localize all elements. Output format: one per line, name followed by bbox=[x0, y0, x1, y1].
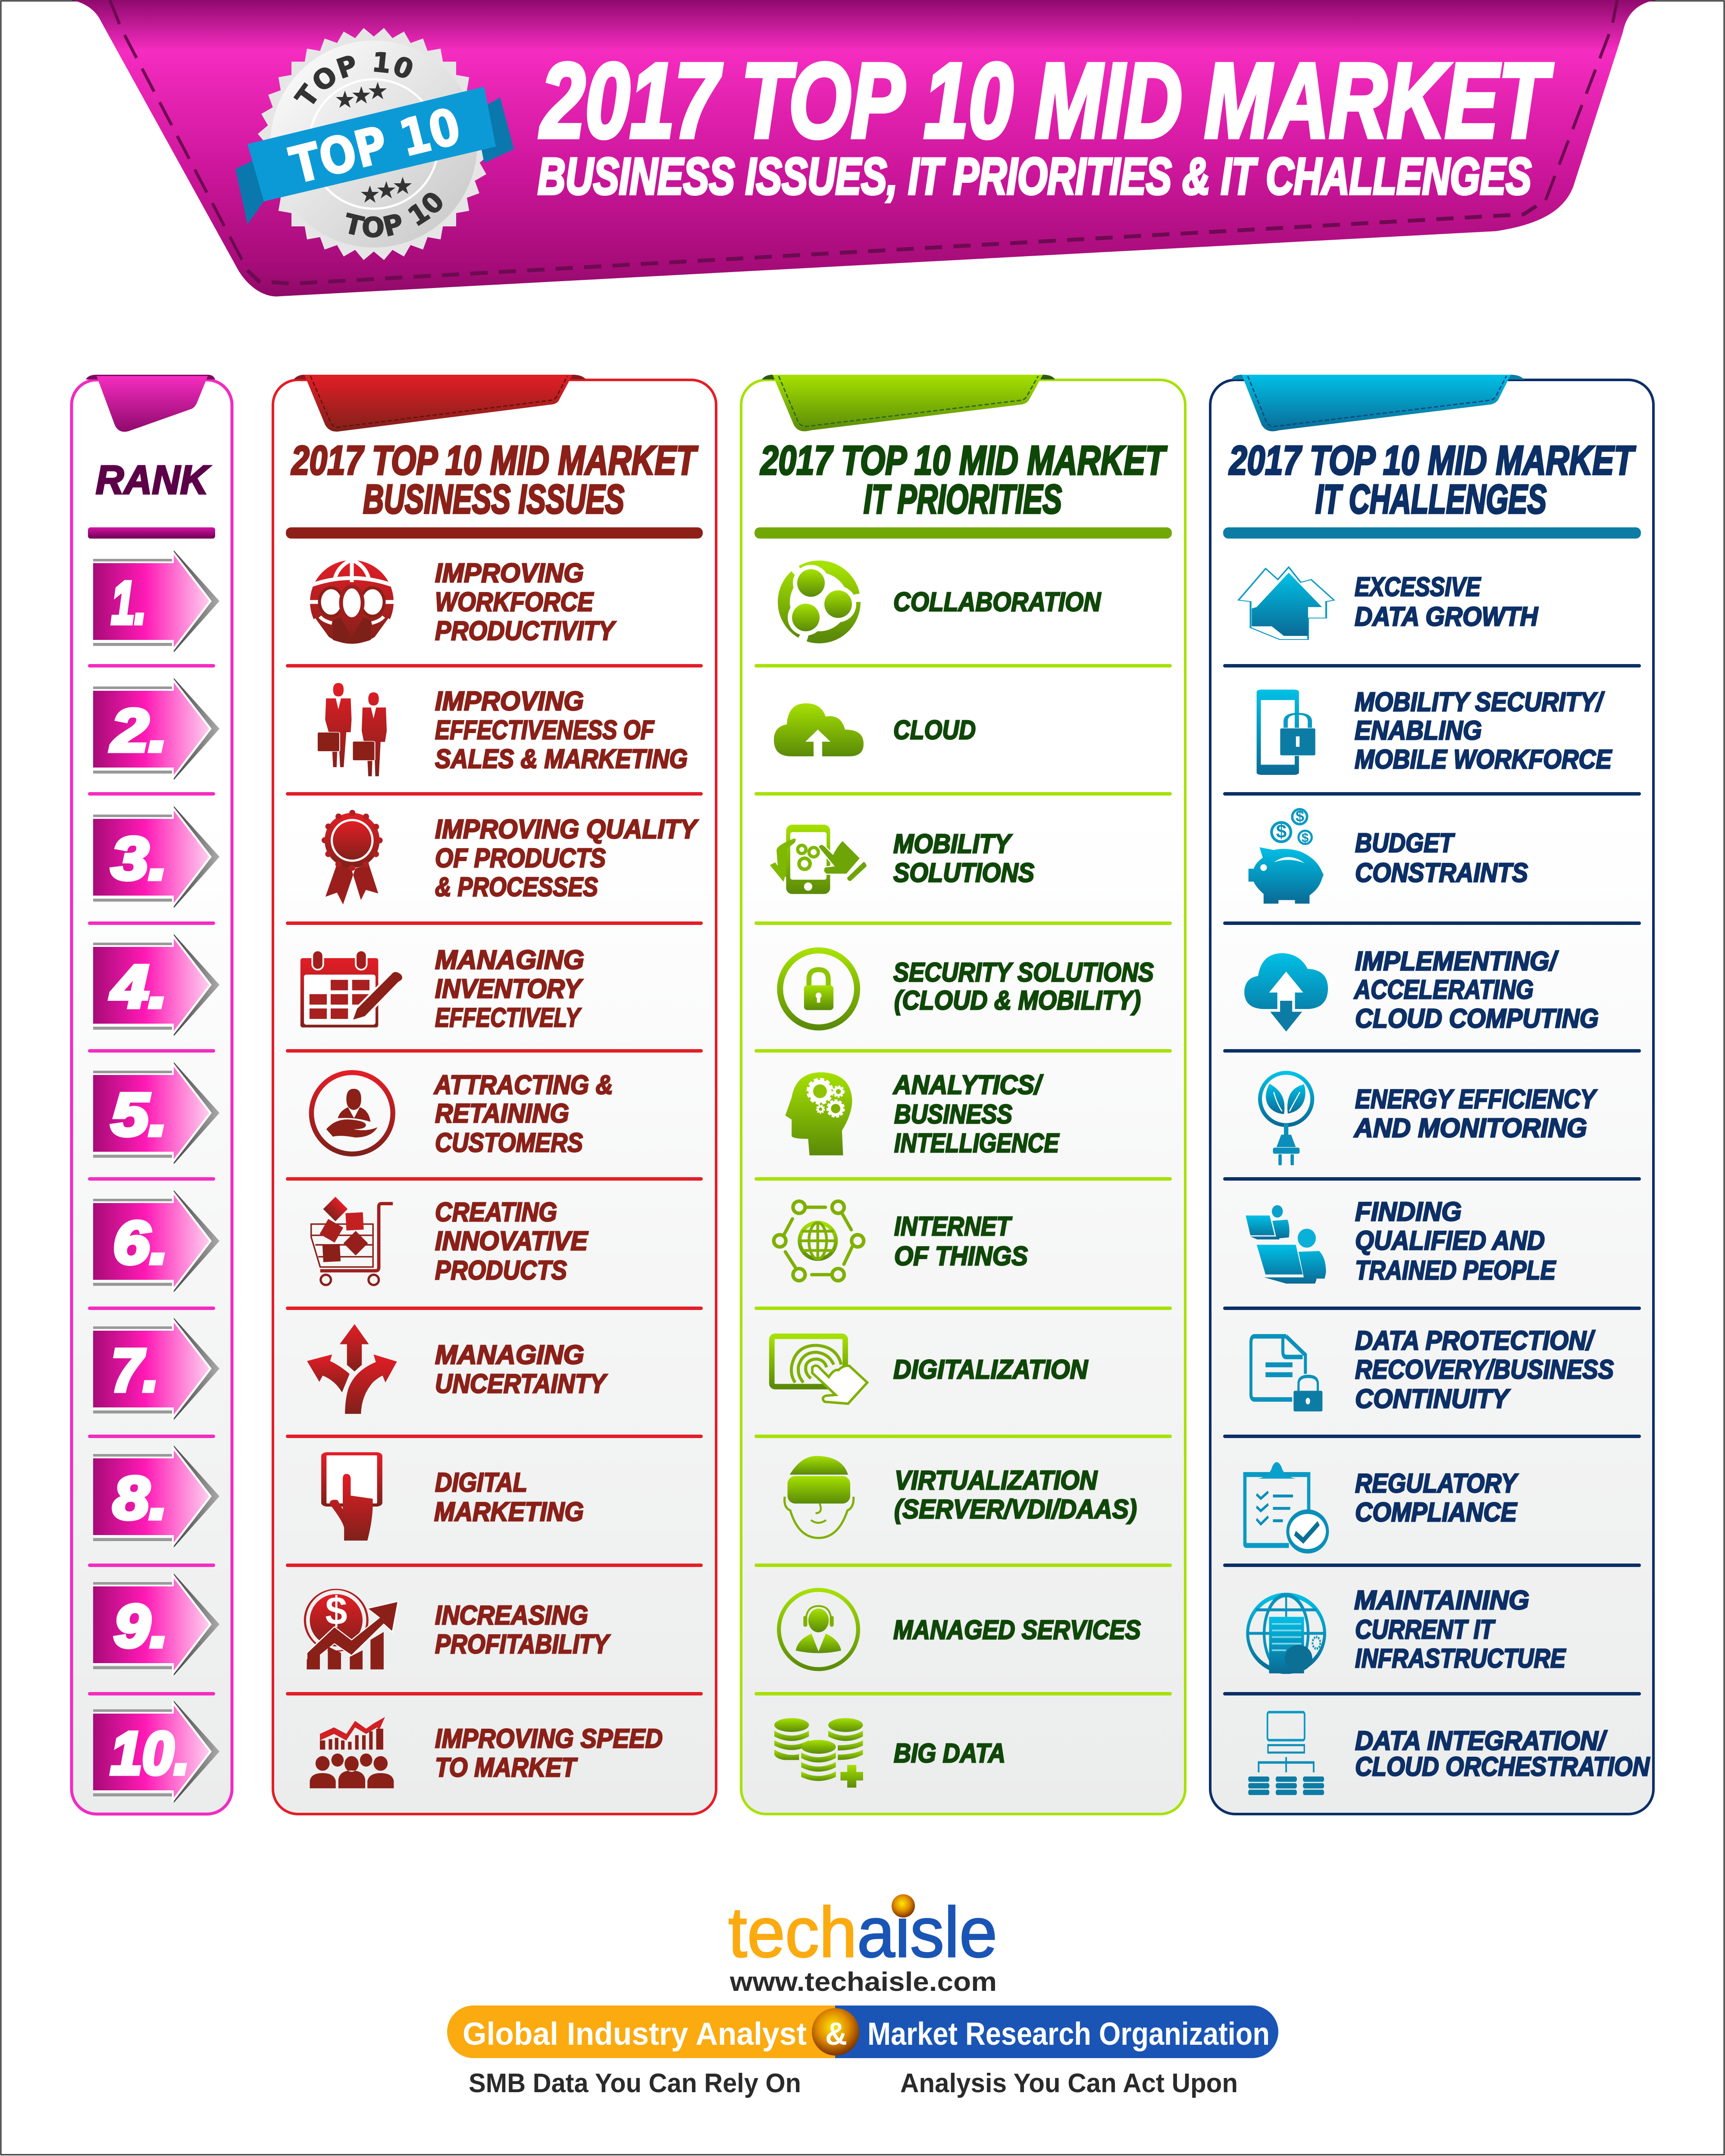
challenges header bar bbox=[1223, 527, 1641, 539]
rank 4 arrow: 4. bbox=[110, 953, 167, 1020]
text: virtualization: (SERVER/VDI/DAAS) bbox=[894, 1495, 1137, 1524]
challenges separators bbox=[1223, 664, 1641, 1695]
coin dollar signs bbox=[1276, 807, 1309, 845]
icon: padlock circle bbox=[780, 950, 857, 1028]
text: excessive data growth: EXCESSIVE bbox=[1355, 572, 1481, 602]
challenges heading bbox=[1228, 438, 1636, 522]
text: creating innovative products: CREATING bbox=[435, 1197, 557, 1227]
pill right text: Market Research Organization bbox=[867, 2016, 1270, 2052]
icon: three way arrows bbox=[307, 1324, 397, 1414]
icon: internet of things bbox=[774, 1201, 864, 1281]
business heading bbox=[291, 438, 698, 522]
panel: business issues bbox=[273, 375, 716, 1814]
rank 8 arrow bbox=[93, 1445, 219, 1548]
priorities panel frame bbox=[741, 380, 1185, 1814]
icon: document and lock bbox=[1251, 1336, 1322, 1411]
pill sphere bbox=[812, 2008, 859, 2056]
icon: business people bbox=[317, 683, 387, 776]
icon: data network bbox=[1248, 1712, 1324, 1795]
rank 7 arrow bbox=[93, 1317, 219, 1420]
rank separators bbox=[88, 664, 215, 1695]
icon: compliance clipboard bbox=[1245, 1462, 1327, 1551]
text: improving workforce productivity: WORKFORCE bbox=[435, 587, 594, 617]
text: improving workforce productivity: PRODUCTIVITY bbox=[435, 616, 617, 646]
text: creating innovative products: INNOVATIVE bbox=[435, 1226, 589, 1256]
pill right bbox=[835, 2006, 1278, 2058]
icon: people at computers bbox=[1246, 1205, 1326, 1284]
coin dollar signs: $ bbox=[1276, 821, 1287, 842]
text: energy efficiency: AND MONITORING bbox=[1353, 1113, 1587, 1143]
rank 5 arrow: 5. bbox=[111, 1081, 167, 1148]
icon: green energy plug bbox=[1260, 1073, 1312, 1165]
icon: globe with people bbox=[310, 560, 394, 644]
panel: it priorities bbox=[741, 375, 1185, 1814]
rank panel frame bbox=[72, 380, 232, 1814]
text: mobility security bbox=[1355, 687, 1612, 774]
rank header bar bbox=[88, 527, 215, 539]
ribbon bottom stitching bbox=[247, 200, 1546, 284]
rank 3 arrow: 3. bbox=[111, 824, 167, 892]
website: www.techaisle.com bbox=[729, 1967, 997, 1997]
text: excessive data growth: DATA GROWTH bbox=[1355, 602, 1538, 632]
icon: virtual reality headset bbox=[785, 1456, 854, 1538]
text: data integration: DATA INTEGRATION/ bbox=[1355, 1726, 1607, 1756]
text: attracting and retaining customers: RETAINING bbox=[435, 1099, 569, 1128]
rank 9 arrow: 9. bbox=[114, 1592, 168, 1660]
rank 10 arrow bbox=[93, 1700, 219, 1803]
text: excessive data growth bbox=[1355, 572, 1538, 632]
icon: tablet and hand bbox=[324, 1454, 380, 1541]
rank 9 arrow bbox=[93, 1573, 219, 1676]
icon: award rosette bbox=[325, 813, 380, 905]
text: mobility solutions: MOBILITY bbox=[893, 829, 1013, 859]
text: analytics business intelligence: ANALYTICS/ bbox=[892, 1070, 1043, 1100]
text: improving effectiveness of sales and marketing: EFFECTIVENESS OF bbox=[435, 715, 655, 745]
text: digital marketing: DIGITAL bbox=[435, 1468, 527, 1498]
rank 6 arrow bbox=[93, 1189, 219, 1293]
text: improving speed to market bbox=[435, 1724, 663, 1783]
priorities tab bbox=[762, 375, 1055, 431]
text: maintaining current it infrastructure: INFRASTRUCTURE bbox=[1355, 1644, 1566, 1673]
tagline pill bbox=[447, 2006, 1278, 2058]
text: mobility security: MOBILE WORKFORCE bbox=[1355, 745, 1612, 774]
band tails bbox=[235, 97, 514, 224]
rank 2 arrow: 2. bbox=[110, 696, 167, 764]
seal teeth bbox=[258, 28, 490, 260]
seal stars bbox=[336, 82, 412, 203]
priorities header bar bbox=[754, 527, 1172, 539]
text: maintaining current it infrastructure: CURRENT IT bbox=[1355, 1615, 1496, 1645]
text: mobility solutions: SOLUTIONS bbox=[893, 858, 1034, 888]
priorities heading: 2017 TOP 10 MID MARKET bbox=[760, 438, 1167, 483]
icon: tablet touch bbox=[772, 1336, 867, 1404]
text: increasing profitability: INCREASING bbox=[435, 1601, 588, 1630]
text: finding qualified and trained people: TRAINED PEOPLE bbox=[1355, 1256, 1556, 1285]
coin dollar signs: $ bbox=[1296, 807, 1304, 825]
rank 2 arrow bbox=[93, 677, 219, 780]
text: mobility solutions bbox=[893, 829, 1034, 888]
text: digital marketing bbox=[434, 1468, 584, 1527]
text: regulatory compliance: COMPLIANCE bbox=[1355, 1498, 1517, 1527]
footer logo bbox=[728, 1893, 997, 1972]
text: analytics business intelligence: BUSINESS bbox=[894, 1100, 1012, 1129]
text: creating innovative products: PRODUCTS bbox=[435, 1256, 567, 1285]
text: managing inventory effectively bbox=[435, 945, 584, 1033]
text: managing uncertainty: MANAGING bbox=[435, 1340, 584, 1370]
rank 4 arrow bbox=[93, 933, 219, 1037]
text: increasing profitability bbox=[435, 1601, 611, 1659]
logo wordmark: techaisle bbox=[728, 1893, 997, 1972]
text: improving effectiveness of sales and marketing: IMPROVING bbox=[435, 686, 584, 716]
seal badge bbox=[235, 28, 514, 260]
slogan right: Analysis You Can Act Upon bbox=[900, 2068, 1238, 2098]
business separators bbox=[286, 664, 703, 1695]
text: managing inventory effectively: INVENTORY bbox=[435, 974, 583, 1004]
text: mobility security: ENABLING bbox=[1355, 716, 1482, 746]
text: budget constraints bbox=[1355, 828, 1528, 888]
icon: support agent bbox=[779, 1590, 858, 1669]
seal arc text bottom: TOP 10 bbox=[334, 180, 456, 255]
icon: data growth arrows bbox=[1239, 567, 1334, 639]
text: data protection: RECOVERY/BUSINESS bbox=[1355, 1355, 1614, 1385]
text: managing inventory effectively: MANAGING bbox=[435, 945, 584, 975]
text: budget constraints: BUDGET bbox=[1355, 828, 1455, 858]
icon: head with gears bbox=[785, 1072, 852, 1155]
text: managing inventory effectively: EFFECTIVELY bbox=[435, 1003, 582, 1033]
ampersand: & bbox=[825, 2016, 847, 2052]
text: attracting and retaining customers bbox=[433, 1070, 613, 1158]
text: improving workforce productivity: IMPROVING bbox=[435, 558, 584, 588]
icon label: dollar sign: $ bbox=[325, 1589, 348, 1633]
text: collaboration: COLLABORATION bbox=[893, 587, 1101, 617]
pill left text: Global Industry Analyst bbox=[463, 2016, 807, 2052]
business panel frame bbox=[273, 380, 716, 1814]
text: finding qualified and trained people: QUALIFIED AND bbox=[1355, 1226, 1545, 1256]
text: improving effectiveness of sales and marketing: SALES & MARKETING bbox=[435, 744, 688, 774]
priorities heading bbox=[760, 438, 1167, 522]
text: data integration: CLOUD ORCHESTRATION bbox=[1355, 1752, 1650, 1782]
icon: big data stacks bbox=[774, 1718, 863, 1788]
business heading: BUSINESS ISSUES bbox=[363, 476, 624, 522]
priorities heading: IT PRIORITIES bbox=[864, 476, 1062, 522]
text: implementing cloud computing: ACCELERATING bbox=[1353, 975, 1534, 1005]
ribbon body bbox=[72, 0, 1656, 297]
text: improving quality of products and processes bbox=[435, 815, 699, 902]
rank 6 arrow: 6. bbox=[113, 1209, 168, 1276]
icon: team and chart bbox=[310, 1717, 394, 1788]
text: security solutions: SECURITY SOLUTIONS bbox=[893, 958, 1154, 987]
text: improving quality of products and processes: & PROCESSES bbox=[435, 872, 598, 902]
text: managing uncertainty: UNCERTAINTY bbox=[435, 1369, 608, 1399]
business heading: 2017 TOP 10 MID MARKET bbox=[291, 438, 698, 483]
priorities separators bbox=[754, 664, 1172, 1695]
text: regulatory compliance bbox=[1355, 1469, 1519, 1527]
text: maintaining current it infrastructure: MAINTAINING bbox=[1354, 1586, 1529, 1615]
seal arc text top: TOP 10 bbox=[282, 31, 426, 118]
icon: shopping cart bbox=[311, 1197, 393, 1285]
text: cloud: CLOUD bbox=[893, 715, 976, 745]
ribbon side stitching bbox=[110, 0, 1617, 270]
challenges tab bbox=[1231, 375, 1524, 431]
text: improving speed to market: TO MARKET bbox=[435, 1753, 578, 1783]
icon: phone and lock bbox=[1257, 689, 1316, 775]
text: implementing cloud computing bbox=[1353, 946, 1599, 1034]
text: internet of things: OF THINGS bbox=[894, 1241, 1028, 1271]
business tab bbox=[294, 375, 586, 432]
rank tab bbox=[86, 375, 215, 432]
text: digitalization: DIGITALIZATION bbox=[893, 1355, 1088, 1385]
challenges panel frame bbox=[1210, 380, 1653, 1814]
icon: cloud transfer bbox=[1244, 953, 1328, 1032]
text: internet of things: INTERNET bbox=[894, 1212, 1012, 1241]
rank 5 arrow bbox=[93, 1061, 219, 1165]
text: virtualization: VIRTUALIZATION bbox=[895, 1466, 1098, 1495]
header ribbon bbox=[72, 0, 1656, 297]
business header bar bbox=[286, 527, 703, 539]
panel: it challenges bbox=[1210, 375, 1653, 1814]
text: digital marketing: MARKETING bbox=[434, 1497, 584, 1527]
text: data protection: CONTINUITY bbox=[1355, 1384, 1511, 1414]
pill left bbox=[447, 2006, 835, 2058]
text: improving quality of products and processes: OF PRODUCTS bbox=[435, 843, 606, 873]
band bbox=[247, 87, 496, 201]
text: implementing cloud computing: CLOUD COMPUTING bbox=[1355, 1004, 1599, 1034]
coin dollar signs: $ bbox=[1302, 831, 1309, 845]
text: security solutions bbox=[893, 958, 1154, 1015]
text: improving quality of products and processes: IMPROVING QUALITY bbox=[435, 815, 699, 844]
text: analytics business intelligence: INTELLIGENCE bbox=[894, 1128, 1059, 1158]
text: data protection bbox=[1355, 1326, 1614, 1414]
band text: TOP 10 bbox=[285, 97, 466, 195]
rank 8 arrow: 8. bbox=[113, 1464, 167, 1532]
text: finding qualified and trained people bbox=[1355, 1197, 1556, 1285]
text: data integration bbox=[1355, 1726, 1650, 1782]
text: attracting and retaining customers: ATTRACTING & bbox=[433, 1070, 613, 1100]
text: managed services: MANAGED SERVICES bbox=[893, 1615, 1141, 1645]
text: improving workforce productivity bbox=[435, 558, 617, 646]
icon: globe and server bbox=[1248, 1595, 1324, 1673]
icon: mobile with gears and hands bbox=[770, 825, 867, 894]
rank 3 arrow bbox=[93, 805, 219, 909]
text: maintaining current it infrastructure bbox=[1354, 1586, 1566, 1673]
text: mobility security: MOBILITY SECURITY/ bbox=[1355, 687, 1605, 717]
slogan left: SMB Data You Can Rely On bbox=[469, 2068, 801, 2098]
text: security solutions: (CLOUD & MOBILITY) bbox=[894, 986, 1141, 1015]
seal inner ring bbox=[309, 79, 438, 209]
text: data protection: DATA PROTECTION/ bbox=[1355, 1326, 1595, 1356]
text: regulatory compliance: REGULATORY bbox=[1355, 1469, 1519, 1498]
seal face bbox=[270, 41, 477, 248]
text: attracting and retaining customers: CUSTOMERS bbox=[435, 1128, 583, 1158]
text: creating innovative products bbox=[435, 1197, 589, 1285]
text: internet of things bbox=[894, 1212, 1028, 1271]
text: increasing profitability: PROFITABILITY bbox=[435, 1630, 611, 1659]
icon: customer in hand bbox=[311, 1072, 393, 1154]
icon: profit chart bbox=[305, 1589, 398, 1669]
rank heading: RANK bbox=[96, 457, 211, 502]
text: energy efficiency bbox=[1353, 1084, 1598, 1143]
icon: calendar and pencil bbox=[301, 950, 403, 1028]
text: finding qualified and trained people: FINDING bbox=[1355, 1197, 1462, 1227]
text: improving speed to market: IMPROVING SPEED bbox=[435, 1724, 663, 1754]
rank 1 arrow: 1. bbox=[111, 569, 146, 636]
text: managing uncertainty bbox=[435, 1340, 608, 1399]
icon: collaboration ring bbox=[784, 565, 856, 637]
icon: piggy bank and coins bbox=[1249, 809, 1324, 904]
text: energy efficiency: ENERGY EFFICIENCY bbox=[1355, 1084, 1598, 1114]
rank 7 arrow: 7. bbox=[111, 1336, 159, 1404]
text: implementing cloud computing: IMPLEMENTING/ bbox=[1355, 946, 1559, 976]
icon: cloud upload bbox=[774, 703, 864, 756]
panel: rank bbox=[72, 375, 232, 1814]
rank 1 arrow bbox=[93, 549, 219, 653]
text: virtualization bbox=[894, 1466, 1137, 1524]
text: analytics business intelligence bbox=[892, 1070, 1059, 1158]
text: improving effectiveness of sales and marketing bbox=[435, 686, 688, 774]
text: budget constraints: CONSTRAINTS bbox=[1355, 858, 1528, 888]
rank 10 arrow: 10. bbox=[110, 1719, 190, 1787]
logo sphere bbox=[892, 1894, 915, 1918]
text: big data: BIG DATA bbox=[894, 1739, 1005, 1768]
challenges heading: IT CHALLENGES bbox=[1315, 476, 1547, 522]
